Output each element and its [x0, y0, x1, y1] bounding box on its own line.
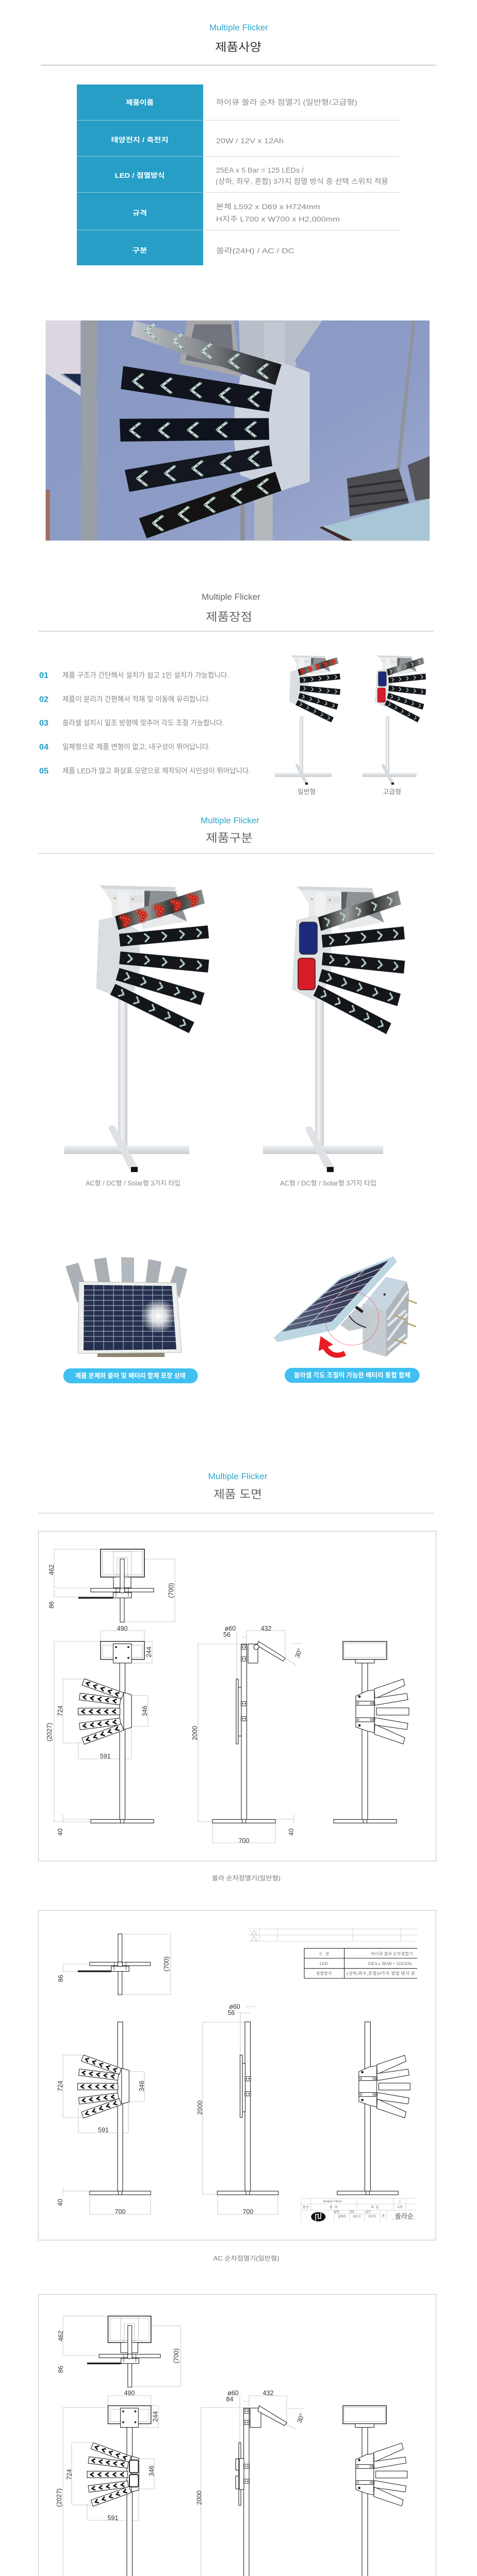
large product caption: AC형 / DC형 / Solar형 3가지 타입 [86, 1179, 180, 1187]
advantage list: 01 [39, 671, 48, 680]
dimensions: 86 [57, 1975, 64, 1982]
table value column: 25EA x 5 Bar = 125 LEDs / [216, 166, 304, 174]
dimensions: 86 [48, 1601, 55, 1608]
top view [78, 1934, 151, 1995]
drawing caption: AC 순차점멸기(일반형) [213, 2255, 279, 2262]
heading: 제품사양 [215, 41, 261, 54]
small product: premium type: 고급형 [383, 788, 401, 795]
table label column: 구분 [132, 246, 147, 255]
table value column [216, 98, 388, 255]
advantage list [39, 671, 251, 776]
title block: 1 [399, 2200, 401, 2203]
pill: packaging label [63, 1368, 198, 1383]
advantage list: 04 [39, 743, 48, 752]
title block: 검도자 [353, 2214, 360, 2218]
dimensions: 490 [117, 1625, 127, 1632]
small product: premium type [363, 655, 426, 795]
dimensions: 700 [243, 2208, 253, 2215]
title block: 재 질 [371, 2205, 379, 2209]
advantage list: 03 [39, 719, 48, 727]
table value column: H지주 L700 x W700 x H2,000mm [216, 215, 340, 223]
dimensions: (700) [163, 1956, 170, 1972]
dimensions: 40 [57, 1828, 64, 1836]
dimensions: (2027) [56, 2488, 63, 2507]
dimensions: 2000 [196, 2100, 204, 2115]
table label column: 제품이름 [126, 99, 154, 106]
dimensions [57, 1956, 253, 2215]
large product caption: AC형 / DC형 / Solar형 3가지 타입 [280, 1179, 376, 1187]
large product: standard [64, 885, 209, 1172]
section label: Multiple Flicker [202, 592, 260, 602]
small revision table [249, 1927, 417, 1941]
table label column: 규격 [133, 209, 147, 217]
dimensions: 462 [57, 2331, 64, 2341]
dimensions: 56 [227, 2009, 235, 2016]
title block: 쏠라순 [395, 2212, 414, 2220]
dimensions: 346 [141, 1706, 149, 1716]
dimensions: 462 [48, 1565, 55, 1575]
advantage list: 제품 구조가 간단해서 설치가 쉽고 1인 설치가 가능합니다. [62, 671, 229, 679]
heading: 제품 도면 [213, 1488, 262, 1501]
heading: 제품구분 [206, 832, 253, 844]
specification table: 점멸방식 [316, 1971, 332, 1976]
dimensions [46, 1565, 304, 1844]
table label column: LED / 점멸방식 [114, 172, 165, 179]
dimensions [56, 2331, 306, 2576]
dimensions: 244 [145, 1647, 153, 1657]
dimensions: (700) [173, 2348, 180, 2363]
large product: premium [263, 886, 405, 1172]
top view [87, 2316, 160, 2387]
dimensions: 244 [152, 2411, 159, 2422]
dimensions: 30° [293, 1647, 304, 1659]
table label column: 태양전지 / 축전지 [111, 136, 168, 144]
dimensions: 56 [223, 1631, 231, 1638]
title block [301, 2198, 417, 2222]
dimensions: 2000 [191, 1726, 199, 1740]
side view [216, 2406, 287, 2576]
photo: packaged solar panel [65, 1257, 187, 1357]
side view [212, 1641, 286, 1823]
section: product specification [41, 23, 436, 265]
title block: 수량 [398, 2206, 403, 2209]
section: product advantages [38, 592, 434, 795]
drawing caption: 쏠라 순차점멸기(일반형) [212, 1874, 281, 1882]
advantage list: 제품 LED가 많고 화살표 모양으로 제작되어 시인성이 뛰어납니다. [62, 767, 251, 775]
table value column: 하이큐 쏠라 순차 점멸기 (일반형/고급형) [216, 98, 357, 106]
specification table: 하이큐 쏠라 순차점멸기 [371, 1951, 413, 1956]
front view [78, 1641, 154, 1823]
rear view [334, 1641, 409, 1823]
dimensions: 40 [288, 1828, 295, 1836]
drawing panel: AC standard [38, 1910, 436, 2240]
section label: Multiple Flicker [208, 1471, 268, 1481]
pill: battery housing label: 쏠라셀 각도 조절이 가능한 배터리 통합 함체 [294, 1371, 410, 1379]
dimensions: 700 [239, 1837, 249, 1844]
table value column: 20W / 12V x 12Ah [216, 137, 284, 145]
dimensions: 591 [108, 2514, 118, 2521]
dimensions: 40 [57, 2199, 64, 2206]
advantage list: 쏠라셀 설치시 일조 방향에 맞추어 각도 조절 가능합니다. [62, 719, 224, 727]
title block: 검도 [350, 2210, 355, 2214]
title block: 명 [382, 2214, 385, 2218]
specification table: LED [320, 1961, 328, 1966]
title block: Multiple Flikker [323, 2200, 342, 2203]
dimensions: 346 [148, 2466, 155, 2476]
dimensions: 591 [98, 2127, 109, 2134]
advantage list: 05 [39, 767, 48, 776]
dimensions: 346 [138, 2081, 145, 2091]
heading: 제품장점 [206, 611, 252, 623]
pill: packaging label: 제품 본체와 쏠라 및 배터리 함체 포장 상태 [75, 1371, 186, 1380]
drawing panel: solar standard [38, 1531, 436, 1861]
spec table [77, 84, 400, 265]
title block: 승인자 [368, 2214, 376, 2218]
side view [217, 2022, 278, 2195]
drawing panel: solar premium [38, 2295, 436, 2576]
specification table: (상하,좌우,혼합)3가지 점멸 방식 중 [347, 1971, 415, 1976]
front view [87, 2406, 160, 2576]
dimensions: 700 [115, 2208, 125, 2215]
product photo [46, 320, 430, 540]
section: product drawings [38, 1471, 436, 2576]
dimensions: 30° [295, 2412, 306, 2424]
dimensions: ø60 [227, 2389, 239, 2397]
table value column: 본체 L592 x D69 x H724mm [216, 202, 320, 211]
rear view [337, 2022, 410, 2195]
specification table [304, 1948, 417, 1978]
dimensions: 724 [57, 1706, 64, 1716]
dimensions: (700) [168, 1583, 175, 1598]
front view [77, 2022, 151, 2195]
dimensions: 490 [124, 2389, 135, 2397]
rear view [334, 2406, 407, 2576]
advantage list: 제품이 분리가 간편해서 적재 및 이동에 유리합니다. [62, 695, 210, 703]
dimensions: 2000 [196, 2490, 203, 2505]
dimensions: 591 [100, 1753, 110, 1760]
table value column: (상하, 좌우, 혼합) 3가지 점멸 방식 중 선택 스위치 적용 [216, 177, 388, 185]
dimensions: 432 [263, 2389, 273, 2397]
specification table: 25EA x 5BAR = 125LEDs [368, 1961, 412, 1966]
dimensions: (2027) [46, 1723, 53, 1741]
table label column [77, 84, 203, 265]
dimensions: 86 [57, 2366, 64, 2373]
dimensions: 724 [57, 2081, 64, 2091]
title block: 품 번 [303, 2205, 309, 2209]
title block: 설계자 [338, 2214, 346, 2218]
top view [78, 1549, 154, 1622]
title block: 품 명 [330, 2206, 337, 2209]
section: product types [38, 816, 434, 1383]
title block: 설계 [334, 2210, 339, 2214]
table value column: 쏠라(24H) / AC / DC [216, 246, 294, 255]
title block: 승인 [366, 2210, 371, 2214]
dimensions: 724 [66, 2469, 73, 2480]
dimensions: ø60 [225, 1625, 236, 1632]
section label: Multiple Flicker [201, 816, 259, 825]
advantage list: 일체형으로 제품 변형이 없고, 내구성이 뛰어납니다. [62, 743, 210, 751]
photo: adjustable solar panel [274, 1256, 417, 1357]
specification table: 구 분 [318, 1951, 330, 1956]
pill: battery housing label [285, 1368, 420, 1383]
small product: standard type: 일반형 [298, 788, 316, 795]
logo [311, 2212, 325, 2222]
small product: standard type [275, 655, 340, 795]
advantage list: 02 [39, 696, 48, 704]
dimensions: 84 [226, 2396, 233, 2403]
section label: Multiple Flicker [209, 23, 268, 32]
dimensions: ø60 [229, 2003, 240, 2010]
dimensions: 432 [261, 1625, 271, 1632]
